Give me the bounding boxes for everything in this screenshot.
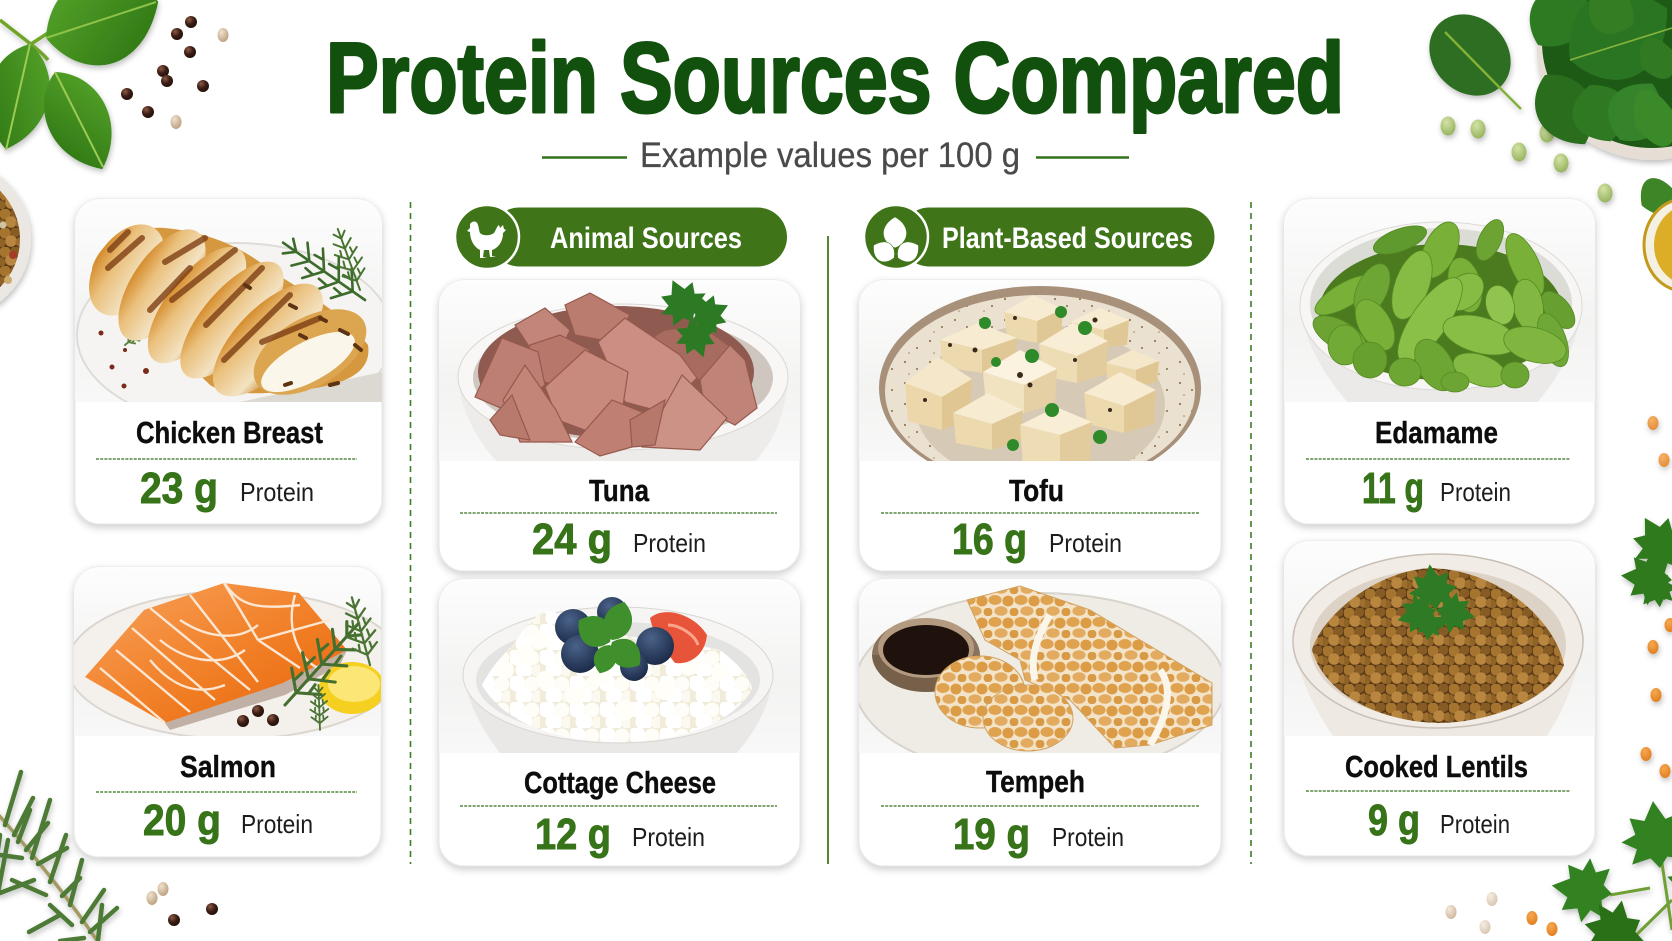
decoration: spinach leaf and peas top right [1413, 0, 1612, 203]
divider: right dashed [1250, 202, 1252, 864]
protein value: Protein [1049, 528, 1122, 558]
heading pill: plant-based sources [864, 205, 1214, 269]
photo: grilled chicken [75, 199, 382, 402]
protein value: 9 g [1368, 796, 1420, 845]
protein value [140, 464, 314, 513]
protein value [953, 810, 1124, 859]
heading pill: animal sources [455, 205, 787, 269]
protein value: 19 g [953, 810, 1030, 859]
decoration: parsley bottom right [1547, 797, 1672, 941]
photo: edamame bowl [1284, 199, 1595, 410]
card: tempeh [855, 579, 1225, 866]
subtitle: Example values per 100 g [640, 136, 1020, 175]
card: cottage cheese [439, 579, 800, 866]
card: tuna [439, 270, 800, 571]
title: Protein Sources Compared [326, 22, 1344, 133]
protein value [535, 810, 705, 859]
protein value: 12 g [535, 810, 611, 859]
protein value [1362, 464, 1511, 513]
protein value: Protein [1440, 809, 1510, 839]
protein value: Protein [1440, 477, 1511, 507]
card: tofu [859, 280, 1221, 571]
decoration: peppercorns bottom left [146, 882, 218, 926]
photo: cottage cheese bowl [439, 579, 800, 760]
protein value [532, 515, 706, 564]
photo: tuna bowl [439, 280, 800, 461]
protein value: 20 g [143, 796, 221, 845]
name: Salmon [180, 749, 276, 784]
name: Chicken Breast [136, 415, 323, 450]
card: salmon [67, 567, 403, 857]
decoration: seeds bottom right [1446, 892, 1558, 936]
protein value: Protein [1052, 822, 1124, 852]
name: Tofu [1009, 473, 1064, 508]
decoration: left bowl of mixed peppercorns [0, 160, 31, 318]
protein value: 23 g [140, 464, 218, 513]
name: Tempeh [986, 764, 1085, 799]
name: Tuna [589, 473, 650, 508]
photo: lentils bowl [1284, 541, 1595, 745]
heading pill: plant-based sources: Plant-Based Sources [942, 222, 1193, 255]
photo: tofu bowl [859, 280, 1221, 461]
decoration: peppercorns top left [121, 16, 228, 129]
protein value: 16 g [952, 515, 1027, 564]
protein value [952, 515, 1122, 564]
divider: center solid [827, 236, 829, 864]
protein value: 11 g [1362, 464, 1424, 513]
heading pill: animal sources: Animal Sources [550, 222, 742, 255]
decoration: seeds and parsley right edge [1619, 416, 1672, 778]
protein value: Protein [241, 809, 313, 839]
icon: hen [467, 221, 506, 258]
protein value: Protein [240, 477, 314, 507]
card: chicken breast [73, 199, 393, 524]
decoration: rosemary bottom left [0, 772, 117, 941]
decoration: spinach bowl top right [1515, 0, 1672, 160]
decoration: oil bowl and leaf right edge [1632, 171, 1672, 291]
protein value [143, 796, 313, 845]
card: cooked lentils [1284, 541, 1595, 856]
card: edamame [1284, 199, 1595, 524]
name: Edamame [1375, 415, 1498, 450]
protein value: 24 g [532, 515, 612, 564]
protein value: Protein [632, 822, 705, 852]
divider: left dashed [410, 202, 412, 864]
photo: salmon fillet [74, 567, 381, 736]
photo: tempeh plate [859, 579, 1221, 753]
name: Cottage Cheese [524, 765, 716, 800]
protein value: Protein [633, 528, 706, 558]
decoration: basil leaves top left [0, 0, 172, 182]
protein value [1368, 796, 1510, 845]
icon: leaves [868, 217, 924, 266]
name: Cooked Lentils [1345, 749, 1528, 784]
